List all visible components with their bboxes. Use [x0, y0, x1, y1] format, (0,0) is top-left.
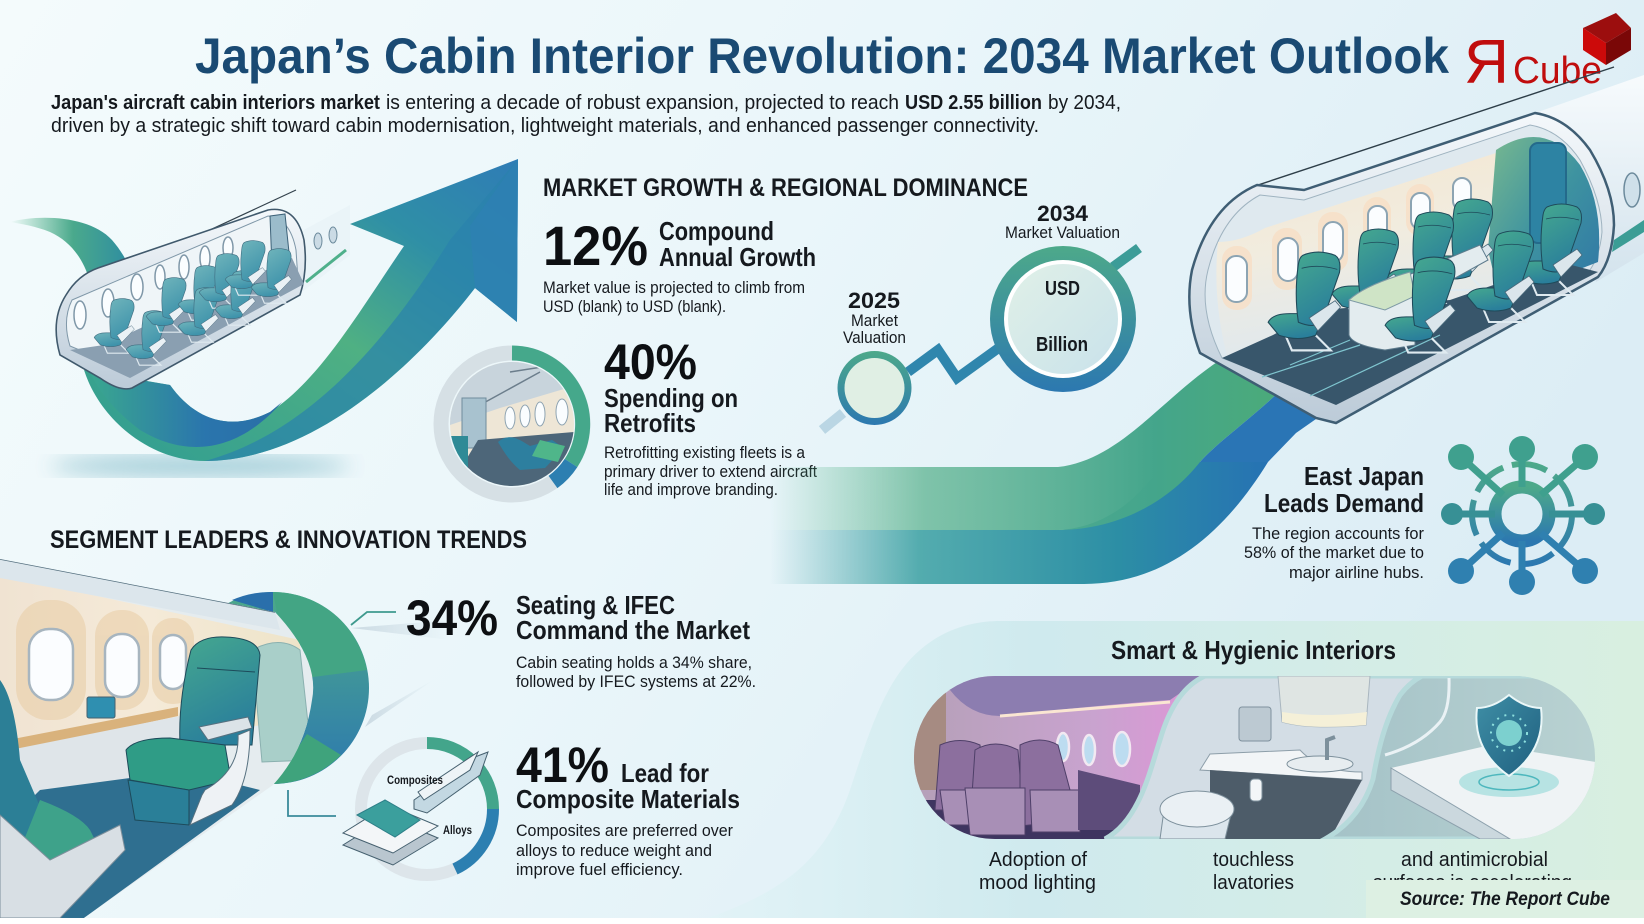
icon: shield — [1476, 695, 1542, 776]
donut: composite materials — [343, 743, 493, 875]
2025 marker: Market — [851, 311, 898, 330]
2034 marker: Billion — [1036, 334, 1088, 356]
stat: 12 percent: USD (blank) to USD (blank). — [543, 297, 726, 316]
seats — [94, 241, 291, 365]
scene: touchless lavatory — [1105, 676, 1440, 839]
icon: hub network — [1441, 436, 1605, 595]
stat: 40 percent retrofits: Retrofits — [604, 408, 696, 438]
cabin photo illustration — [0, 555, 325, 920]
stat: 12 percent: Compound — [659, 216, 774, 246]
2034 marker: 2034 — [1037, 201, 1089, 226]
stat: 40 percent retrofits: Retrofitting existing fleets is a — [604, 443, 805, 462]
heading: Smart & Hygienic Interiors — [1111, 635, 1396, 665]
icon: red cube — [1583, 13, 1631, 65]
captions — [979, 849, 1572, 894]
stat: composite materials: Composite Materials — [516, 784, 740, 814]
stat: seating and IFEC: followed by IFEC systems at 22%. — [516, 672, 756, 691]
stat: composite materials: 41% — [516, 737, 609, 793]
section: market growth — [543, 174, 1028, 316]
captions: lavatories — [1213, 872, 1294, 894]
2034 marker: Market Valuation — [1005, 223, 1120, 242]
callout: East Japan — [1244, 461, 1424, 582]
intro text: USD 2.55 billion — [905, 92, 1042, 114]
stat: 12 percent: Market value is projected to climb from — [543, 278, 805, 297]
callout lines and rays — [288, 612, 450, 816]
source note: Source: The Report Cube — [1400, 889, 1610, 910]
2025 marker: 2025 — [848, 288, 900, 313]
callout: East Japan: 58% of the market due to — [1244, 543, 1424, 562]
intro text: by 2034, — [1048, 92, 1121, 114]
stat: 12 percent — [543, 214, 816, 316]
stat: composite materials: Lead for — [621, 758, 709, 788]
stat: composite materials: Composites are preferred over — [516, 821, 733, 840]
stat: 40 percent retrofits: primary driver to extend aircraft — [604, 462, 817, 481]
title: Japan’s Cabin Interior Revolution: 2034 Market Outlook — [195, 28, 1449, 84]
captions: mood lighting — [979, 872, 1096, 894]
callout: East Japan: East Japan — [1304, 461, 1424, 491]
image strip — [914, 676, 1600, 839]
logo: RCube: Я — [1464, 28, 1509, 97]
console — [1349, 245, 1488, 350]
cabin illustration: small cutaway — [56, 190, 350, 389]
stat: composite materials: improve fuel efficiency. — [516, 860, 683, 879]
captions: touchless — [1213, 849, 1294, 871]
cabin illustration: large cutaway — [1189, 67, 1644, 423]
ribbon swoosh — [770, 360, 1336, 584]
seat — [126, 637, 260, 825]
scene: antimicrobial surface — [1325, 676, 1600, 839]
logo: RCube — [1464, 13, 1631, 97]
captions: surfaces is accelerating — [1373, 872, 1572, 894]
callout: East Japan: The region accounts for — [1252, 524, 1424, 543]
donut: composite materials: Alloys — [443, 823, 472, 837]
stat: 12 percent: Annual Growth — [659, 242, 816, 272]
stat: seating and IFEC: Seating & IFEC — [516, 590, 675, 620]
growth arrow — [10, 159, 518, 476]
captions: and antimicrobial — [1401, 849, 1548, 871]
intro text: is entering a decade of robust expansion, projected to reach — [386, 92, 899, 114]
2034 marker: USD — [1045, 278, 1080, 300]
scene: mood lighting — [914, 676, 1214, 839]
stat: composite materials: alloys to reduce weight and — [516, 841, 712, 860]
stat: 12 percent: 12% — [543, 214, 648, 277]
chart: valuation growth line — [822, 201, 1139, 430]
stat: seating and IFEC — [406, 590, 756, 691]
source note — [1366, 880, 1644, 918]
2034 marker — [990, 201, 1136, 392]
2025 marker: Valuation — [843, 328, 906, 347]
captions: Adoption of — [989, 849, 1087, 871]
logo: RCube: Cube — [1513, 50, 1602, 92]
foreground seat — [0, 680, 125, 918]
donut: composite materials: Composites — [387, 773, 443, 787]
intro text: Japan's aircraft cabin interiors market — [51, 92, 380, 114]
callout: East Japan: major airline hubs. — [1289, 563, 1424, 582]
heading: MARKET GROWTH & REGIONAL DOMINANCE — [543, 174, 1028, 202]
stat: seating and IFEC: 34% — [406, 590, 498, 646]
stat: 40 percent retrofits: life and improve branding. — [604, 480, 778, 499]
donut: retrofit share with cabin image — [441, 353, 583, 495]
stat: 40 percent retrofits: 40% — [604, 334, 697, 390]
panel: smart and hygienic interiors — [822, 621, 1644, 918]
stat: seating and IFEC: Command the Market — [516, 615, 750, 645]
pie: seating share — [177, 592, 369, 784]
section heading: segment leaders: SEGMENT LEADERS & INNOVATION TRENDS — [50, 526, 527, 554]
intro text — [51, 92, 1121, 137]
seats — [1268, 199, 1582, 350]
2025 marker — [838, 288, 912, 425]
stat: seating and IFEC: Cabin seating holds a 34% share, — [516, 653, 752, 672]
stat: 40 percent retrofits: Spending on — [604, 383, 738, 413]
stat: 40 percent retrofits — [604, 334, 817, 499]
icon: composite sheet — [414, 752, 488, 813]
intro text: driven by a strategic shift toward cabin modernisation, lightweight materials, and enhanced passenger connectivity. — [51, 115, 1039, 137]
stat: composite materials — [516, 737, 740, 879]
callout: East Japan: Leads Demand — [1264, 488, 1424, 518]
icon: alloy sheets — [343, 800, 438, 865]
